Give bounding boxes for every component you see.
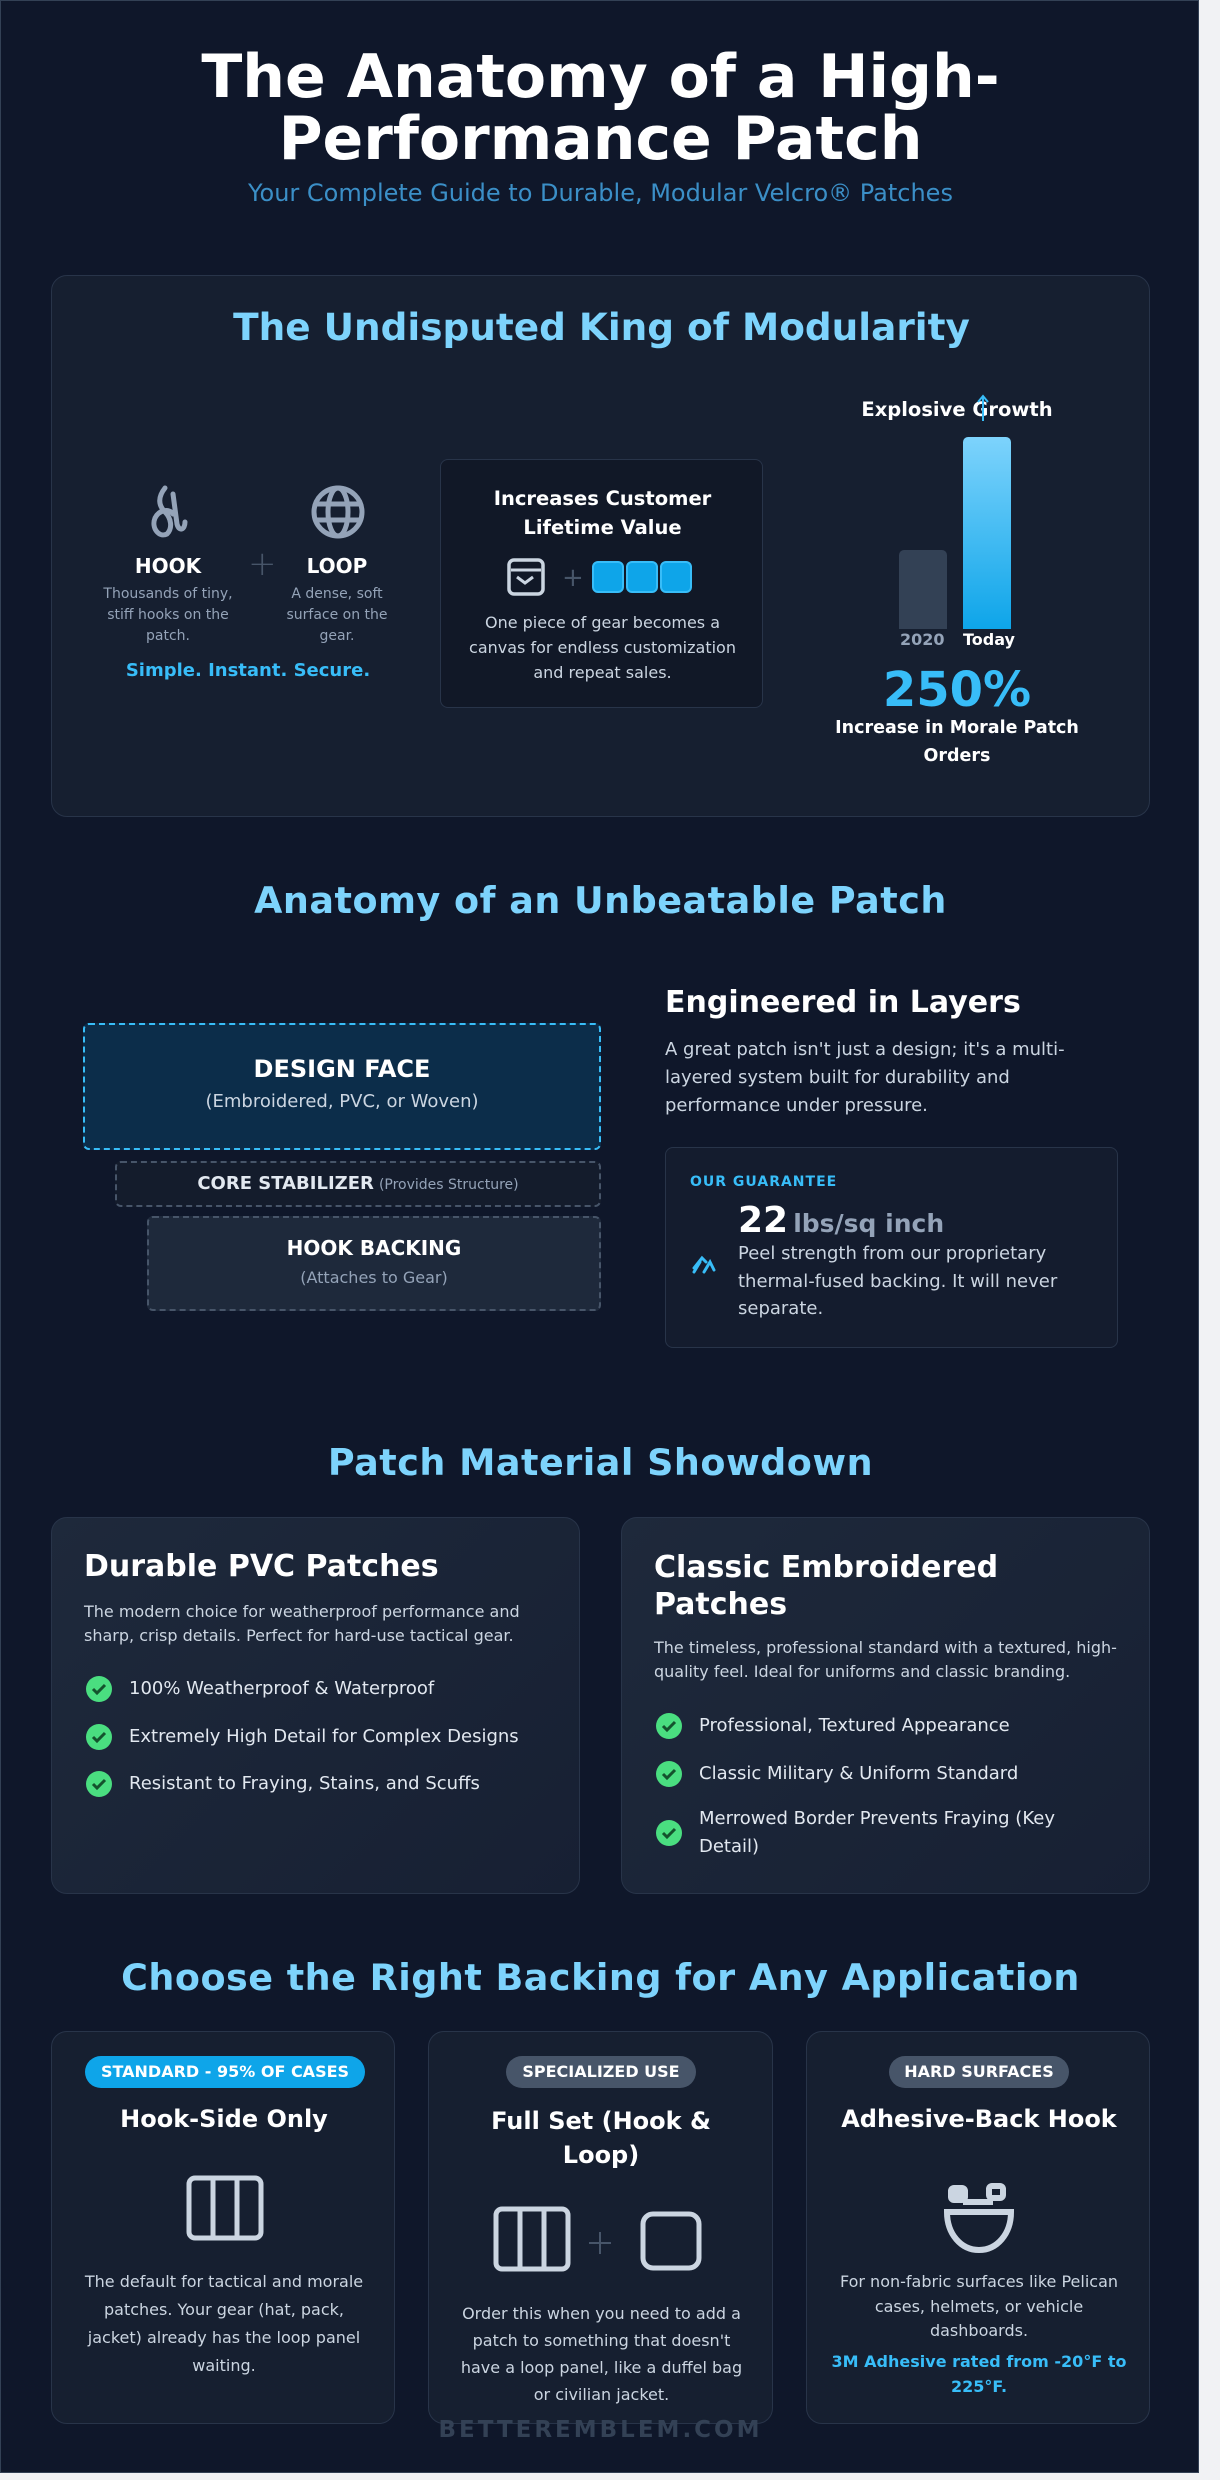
heading: anatomy: Anatomy of an Unbeatable Patch (254, 879, 947, 922)
callout: guarantee (665, 1147, 1118, 1348)
box title: Increases Customer (494, 487, 711, 510)
layer stack (83, 1023, 601, 1311)
stat: 250%: 250% (883, 662, 1031, 718)
tagline: Simple. Instant. Secure. (126, 660, 370, 681)
chart title: Explosive Growth (861, 398, 1053, 421)
arrow (977, 394, 989, 421)
icon: helmet (944, 2183, 1014, 2253)
callout: guarantee: 22 lbs/sq inch (738, 1200, 944, 1241)
card: embroidered: Classic Embroidered Patches (654, 1550, 998, 1622)
callout: guarantee: Peel strength from our proprietary thermal-fused backing. It will never separate. (738, 1243, 1057, 1319)
layer: design face (83, 1023, 601, 1150)
list item: Classic Military & Uniform Standard (699, 1763, 1018, 1784)
icon: hook (151, 486, 188, 538)
title (201, 42, 1000, 174)
card: full set (428, 2031, 773, 2424)
card: adhesive: HARD SURFACES (904, 2062, 1054, 2081)
layer: design face: (Embroidered, PVC, or Woven) (205, 1091, 479, 1112)
card: PVC: Durable PVC Patches (84, 1549, 439, 1584)
icon: hook plus loop (494, 2206, 702, 2272)
box title (494, 487, 712, 539)
callout: guarantee: OUR GUARANTEE (690, 1174, 837, 1190)
heading: showdown: Patch Material Showdown (328, 1441, 873, 1484)
bar: 2020 (899, 550, 947, 629)
card: adhesive: For non-fabric surfaces like Pelican cases, helmets, or vehicle dashboards. (840, 2272, 1118, 2340)
card: PVC (51, 1517, 580, 1894)
card: full set: SPECIALIZED USE (522, 2062, 680, 2081)
card: adhesive: Adhesive-Back Hook (841, 2105, 1117, 2133)
heading: modularity: The Undisputed King of Modularity (233, 305, 970, 349)
layer: design face: DESIGN FACE (254, 1055, 430, 1083)
layer: hook backing: (Attaches to Gear) (300, 1268, 448, 1287)
stat caption: Increase in Morale Patch Orders (835, 718, 1079, 766)
text: hook: Thousands of tiny, stiff hooks on the patch. (103, 586, 233, 644)
card: hook side only: The default for tactical and morale patches. Your gear (hat, pack, jacket) already has the loop panel waiting. (85, 2272, 363, 2375)
text: engineered in layers: A great patch isn't just a design; it's a multi-layered system built for durability and performance under pressure. (665, 1039, 1065, 1116)
card: PVC: The modern choice for weatherproof performance and sharp, crisp details. Perfect for hard-use tactical gear. (84, 1602, 520, 1645)
text: loop (286, 554, 388, 644)
card: full set: Order this when you need to add a patch to something that doesn't have a loop panel, like a duffel bag or civilian jacket. (461, 2304, 742, 2404)
box: customer lifetime value (440, 459, 763, 708)
list item: Merrowed Border Prevents Fraying (Key Detail) (699, 1808, 1055, 1857)
card: hook side only: STANDARD - 95% OF CASES (101, 2062, 349, 2081)
text: hook: HOOK (135, 554, 201, 578)
card: hook side only: Hook-Side Only (120, 2105, 328, 2133)
text: loop: LOOP (307, 554, 367, 578)
panel: modularity (51, 275, 1150, 817)
list item: Professional, Textured Appearance (699, 1715, 1010, 1736)
icon: link (692, 1256, 716, 1274)
box title: Lifetime Value (523, 516, 682, 539)
bar: today (963, 437, 1011, 629)
text: engineered in layers: Engineered in Layers (665, 985, 1021, 1020)
card: embroidered: The timeless, professional standard with a textured, high-quality feel. Ideal for uniforms and classic branding. (654, 1638, 1117, 1681)
text: hook (103, 554, 233, 644)
icon: gear plus patches: + (562, 563, 584, 593)
card: embroidered (621, 1517, 1150, 1894)
card: hook side only (51, 2031, 395, 2424)
text: engineered in layers (665, 985, 1065, 1116)
card: adhesive: 3M Adhesive rated from -20°F to 225°F. (832, 2352, 1126, 2396)
text: loop: A dense, soft surface on the gear. (286, 586, 388, 644)
list item: 100% Weatherproof & Waterproof (129, 1678, 434, 1699)
footer: BETTEREMBLEM.COM (438, 2417, 762, 2443)
icon: hook panel (186, 2176, 264, 2240)
subtitle: Your Complete Guide to Durable, Modular Velcro® Patches (248, 179, 953, 207)
list item: Extremely High Detail for Complex Designs (129, 1726, 519, 1747)
heading: backing: Choose the Right Backing for Any Application (121, 1956, 1080, 1999)
chart: explosive growth: Today (963, 630, 1015, 649)
icon: gear plus patches (507, 558, 692, 596)
title: Performance Patch (279, 104, 922, 174)
icon: globe (312, 486, 364, 538)
plus: + (248, 544, 276, 584)
title: The Anatomy of a High- (201, 42, 1000, 112)
list item: Resistant to Fraying, Stains, and Scuffs (129, 1773, 480, 1794)
card: full set: Full Set (Hook & Loop) (491, 2107, 711, 2169)
card: adhesive (806, 2031, 1150, 2424)
layer: core stabilizer (115, 1161, 601, 1207)
layer: hook backing: HOOK BACKING (287, 1236, 461, 1260)
chart: explosive growth (835, 394, 1079, 766)
layer: core stabilizer: CORE STABILIZER (Provides Structure) (197, 1173, 519, 1194)
layer: hook backing (147, 1216, 601, 1311)
box description: One piece of gear becomes a canvas for endless customization and repeat sales. (469, 613, 736, 682)
bar labels: 2020 (900, 630, 945, 649)
